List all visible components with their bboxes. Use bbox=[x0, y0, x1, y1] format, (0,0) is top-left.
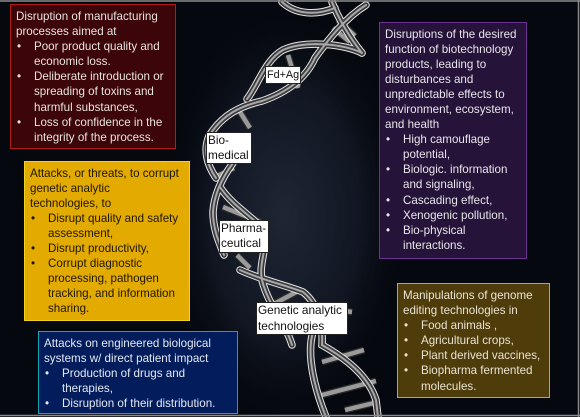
panel: genetic analytic attacks: technologies, to bbox=[30, 197, 111, 210]
panel: genetic analytic attacks: Corrupt diagnostic bbox=[48, 257, 142, 270]
label: Bio-medical: medical bbox=[208, 148, 249, 162]
panel: genetic analytic attacks bbox=[24, 161, 190, 321]
panel: biotechnology product disruption: interactions. bbox=[403, 239, 466, 252]
panel: manufacturing disruption: harmful substances, bbox=[34, 101, 138, 114]
panel: biotechnology product disruption: Disruptions of the desired bbox=[385, 28, 516, 40]
label: Pharmaceutical bbox=[219, 220, 269, 253]
panel: biotechnology product disruption: and health bbox=[385, 118, 439, 131]
panel: biotechnology product disruption: disturbances and bbox=[385, 73, 473, 86]
panel: genetic analytic attacks: Attacks, or threats, to corrupt bbox=[30, 166, 179, 180]
label: Genetic analytic technologies: Genetic analytic bbox=[258, 303, 342, 317]
panel: patient impact attacks: Disruption of their distribution. bbox=[62, 397, 215, 410]
panel: genetic analytic attacks: sharing. bbox=[48, 302, 89, 315]
panel: biotechnology product disruption: Bio-physical bbox=[403, 224, 466, 237]
panel: biotechnology product disruption: products, leading to bbox=[385, 58, 486, 71]
panel: genome editing manipulations: molecules. bbox=[421, 380, 476, 393]
panel: genome editing manipulations: editing technologies in bbox=[403, 304, 518, 317]
panel: genetic analytic attacks: tracking, and information bbox=[48, 287, 175, 300]
panel: biotechnology product disruption: potential, bbox=[403, 148, 450, 161]
panel: biotechnology product disruption: Cascading effect, bbox=[403, 194, 492, 207]
panel: genetic analytic attacks: assessment, bbox=[48, 227, 113, 240]
panel: manufacturing disruption: Disruption of manufacturing bbox=[16, 10, 158, 23]
label: Fd+Ag bbox=[265, 66, 301, 84]
panel: biotechnology product disruption: and signaling, bbox=[403, 178, 475, 191]
panel: genome editing manipulations: Agricultural crops, bbox=[421, 334, 514, 347]
panel: genetic analytic attacks: Disrupt productivity, bbox=[48, 242, 149, 255]
panel: patient impact attacks bbox=[38, 331, 238, 414]
panel: biotechnology product disruption: function of biotechnology bbox=[385, 43, 513, 56]
panel: genome editing manipulations: Food animals , bbox=[421, 319, 497, 332]
label: Bio-medical bbox=[206, 132, 252, 164]
panel: biotechnology product disruption: Biologic. information bbox=[403, 163, 507, 176]
label: Pharmaceutical: Pharma- bbox=[221, 221, 266, 235]
panel: genome editing manipulations: Biopharma fermented bbox=[421, 364, 532, 377]
panel: manufacturing disruption: Loss of confidence in the bbox=[34, 116, 162, 129]
panel: patient impact attacks: therapies, bbox=[62, 382, 113, 395]
panel: genome editing manipulations: Manipulations of genome bbox=[403, 289, 533, 302]
panel: genome editing manipulations: Plant derived vaccines, bbox=[421, 349, 540, 362]
label: Bio-medical: Bio- bbox=[208, 133, 229, 147]
panel: patient impact attacks: Production of drugs and bbox=[62, 367, 185, 380]
panel: manufacturing disruption: Poor product quality and bbox=[34, 40, 160, 53]
panel: manufacturing disruption bbox=[10, 4, 176, 149]
panel: patient impact attacks: Attacks on engineered biological bbox=[44, 336, 211, 350]
panel: genetic analytic attacks: processing, pathogen bbox=[48, 272, 159, 285]
panel: manufacturing disruption: Deliberate introduction or bbox=[34, 70, 164, 83]
panel: biotechnology product disruption: environment, ecosystem, bbox=[385, 103, 514, 116]
DNA helix bbox=[206, 2, 378, 417]
panel: biotechnology product disruption: unpredictable effects to bbox=[385, 88, 505, 101]
panel: manufacturing disruption: processes aimed at bbox=[16, 25, 117, 38]
panel: manufacturing disruption: spreading of toxins and bbox=[34, 85, 154, 98]
panel: manufacturing disruption: economic loss. bbox=[34, 55, 111, 68]
panel: biotechnology product disruption: Xenogenic pollution, bbox=[403, 209, 507, 222]
panel: biotechnology product disruption bbox=[379, 22, 527, 259]
label: Genetic analytic technologies bbox=[256, 302, 348, 335]
label: Pharmaceutical: ceutical bbox=[221, 236, 261, 250]
panel: genetic analytic attacks: Disrupt quality and safety bbox=[48, 212, 178, 225]
panel: genetic analytic attacks: genetic analytic bbox=[30, 182, 110, 195]
panel: genome editing manipulations bbox=[397, 283, 550, 398]
label: Fd+Ag: Fd+Ag bbox=[267, 69, 299, 81]
label: Genetic analytic technologies: technologies bbox=[258, 318, 324, 332]
panel: manufacturing disruption: integrity of the process. bbox=[34, 131, 154, 144]
panel: patient impact attacks: systems w/ direct patient impact bbox=[44, 352, 208, 365]
panel: biotechnology product disruption: High camouflage bbox=[403, 133, 490, 146]
